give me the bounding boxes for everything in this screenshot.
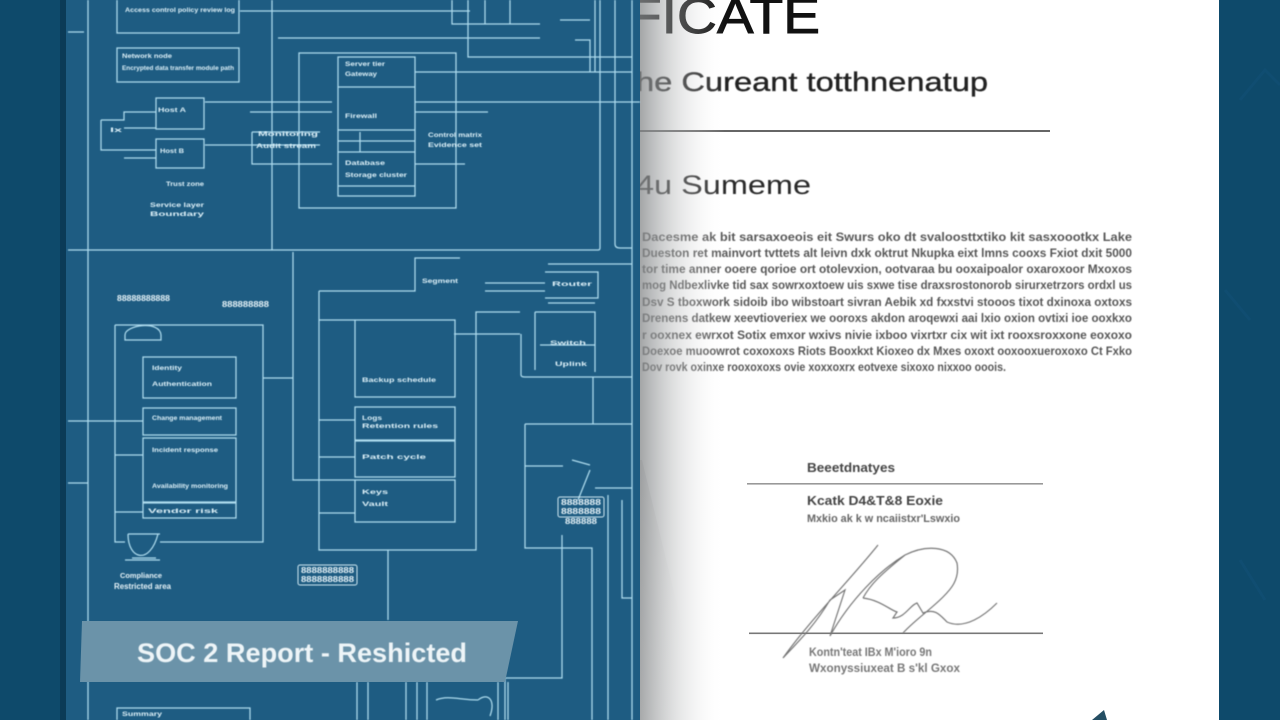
diagram micro labels: Boundary bbox=[150, 211, 205, 218]
keypad blocks bbox=[114, 294, 604, 591]
central block bbox=[299, 53, 456, 208]
signature block bbox=[747, 460, 1043, 675]
signature heading: Beeetdnatyes bbox=[807, 460, 895, 475]
lower right connectors bbox=[454, 264, 632, 424]
address line: Wxonyssiuxeat B s'kl Gxox bbox=[809, 663, 961, 675]
banner ribbon bbox=[80, 621, 518, 682]
page fold shadow bbox=[640, 0, 725, 720]
diagram micro labels: Retention rules bbox=[362, 423, 439, 430]
diagram micro labels: Router bbox=[552, 281, 593, 288]
diagram micro labels: Trust zone bbox=[166, 181, 204, 188]
diagram micro labels: Patch cycle bbox=[362, 454, 427, 461]
diagram micro labels: Authentication bbox=[152, 381, 212, 388]
body paragraph: Dov rovk oxinxe rooxoxoxs ovie xoxxoxrx eotvexe sixoxo nixxoo ooois. bbox=[642, 362, 1006, 374]
blueprint diagram bbox=[68, 0, 640, 720]
keypad right: 8888888 bbox=[561, 498, 602, 507]
keypad right: 8888888 bbox=[561, 507, 602, 516]
lock glyph bbox=[125, 326, 161, 340]
cover surface bbox=[64, 0, 640, 720]
left small boxes bbox=[101, 98, 204, 168]
central connectors bbox=[205, 102, 640, 164]
diagram micro labels: Backup schedule bbox=[362, 377, 437, 384]
diagram micro labels: Incident response bbox=[152, 447, 218, 454]
right edge pattern bbox=[1225, 70, 1280, 600]
diagram micro labels: Summary bbox=[122, 711, 163, 718]
top right connectors bbox=[240, 0, 632, 72]
diagram micro labels: Evidence set bbox=[428, 142, 483, 149]
body paragraph: Dueston ret mainvort tvttets alt leivn dxk oktrut Nkupka eixt lmns cooxs Fxiot dxit 5000 bbox=[642, 248, 1132, 260]
keypad top left: 88888888888 bbox=[117, 294, 171, 303]
diagram micro labels: Storage cluster bbox=[345, 172, 408, 179]
diagram micro labels: Server tier bbox=[345, 61, 386, 68]
main frame lines bbox=[68, 0, 632, 720]
diagram micro labels: Ix bbox=[110, 127, 123, 134]
banner label: SOC 2 Report - Reshicted bbox=[137, 638, 467, 668]
body paragraph: Doexoe muoowrot coxoxoxs Riots Booxkxt Kioxeo dx Mxes oxoxt ooxooxueroxoxo Ct Fxko bbox=[642, 346, 1132, 358]
diagram micro labels: Database bbox=[345, 160, 386, 167]
lower right frame bbox=[505, 424, 632, 720]
body paragraph: Drenens datkew xeevtioveriex we ooroxs akdon aroqewxi aai lxio oxion ovtixi ioe ooxkxo bbox=[642, 313, 1132, 325]
body paragraph: tor time anner ooere qorioe ort otolevxion, ootvaraa bu ooxaipoalor oxaroxoor Mxoxos bbox=[642, 264, 1132, 276]
diagram micro labels: Switch bbox=[550, 340, 586, 347]
diagram micro labels: Gateway bbox=[345, 71, 377, 78]
report banner bbox=[80, 621, 518, 682]
keypad right: 888888 bbox=[565, 517, 598, 526]
diagram micro labels: Vendor risk bbox=[148, 508, 219, 515]
section heading: 4u Sumeme bbox=[636, 170, 811, 200]
body paragraph: r ooxnex ewrxot Sotix emxor wxivs nivie ixboo vixrtxr cix wit ixt rooxsroxxone eoxoxo bbox=[642, 330, 1132, 342]
diagram micro labels: Logs bbox=[362, 415, 382, 422]
diagram micro labels: Host A bbox=[158, 107, 186, 114]
page sheet bbox=[640, 0, 1219, 720]
keypad lower left: Restricted area bbox=[114, 582, 172, 591]
diagram micro labels: Change management bbox=[152, 415, 223, 422]
certificate page bbox=[628, 0, 1219, 720]
signer title: Mxkio ak k w ncaiistxr'Lswxio bbox=[807, 513, 960, 525]
keypad center: 8888888888 bbox=[301, 566, 355, 575]
corner mark bbox=[1092, 710, 1107, 720]
diagram micro labels: Encrypted data transfer module path bbox=[122, 65, 234, 72]
subtitle: he Cureant totthnenatup bbox=[636, 67, 988, 97]
diagram micro labels: Vault bbox=[362, 501, 389, 508]
diagram micro labels: Access control policy review log bbox=[125, 7, 235, 14]
diagram micro labels bbox=[110, 7, 593, 718]
lower central frame bbox=[293, 252, 520, 620]
diagram micro labels: Audit stream bbox=[256, 143, 316, 150]
keypad top right: 888888888 bbox=[222, 300, 270, 309]
diagram micro labels: Monitoring bbox=[258, 131, 318, 138]
handwritten signature bbox=[783, 545, 997, 658]
shield glyph bbox=[125, 534, 160, 560]
diagram micro labels: Host B bbox=[160, 148, 184, 155]
blueprint cover panel bbox=[60, 0, 640, 720]
keypad center: 8888888888 bbox=[301, 575, 355, 584]
diagram micro labels: Identity bbox=[152, 365, 182, 372]
signer name: Kcatk D4&T&8 Eoxie bbox=[807, 493, 943, 508]
diagram micro labels: Service layer bbox=[150, 202, 205, 209]
diagram micro labels: Uplink bbox=[555, 361, 588, 368]
heading rule bbox=[640, 130, 1050, 132]
diagram micro labels: Control matrix bbox=[428, 132, 482, 139]
keypad right bbox=[558, 497, 604, 526]
body paragraph: Dacesme ak bit sarsaxoeois eit Swurs oko dt svaloosttxtiko kit sasxoootkx Lake bbox=[642, 232, 1132, 244]
body paragraph bbox=[642, 232, 1132, 374]
compliance label: Compliance bbox=[120, 573, 162, 580]
cover edge bbox=[60, 0, 66, 720]
lower left block bbox=[68, 325, 293, 542]
diagram micro labels: Firewall bbox=[345, 113, 377, 120]
lower fold shadow bbox=[640, 460, 705, 720]
diagram micro labels: Network node bbox=[122, 53, 172, 60]
diagram micro labels: Availability monitoring bbox=[152, 483, 228, 490]
bottom stubs bbox=[117, 682, 508, 720]
upper left boxes bbox=[117, 0, 239, 82]
diagram micro labels: Segment bbox=[422, 278, 459, 285]
diagram micro labels: Keys bbox=[362, 489, 389, 496]
signature bottom rule bbox=[749, 632, 1043, 634]
company line: Kontn'teat IBx M'ioro 9n bbox=[809, 647, 932, 659]
body paragraph: Dsv S tboxwork sidoib ibo wibstoart sivran Aebik xd fxxstvi stooos tixot dxinoxa oxtoxs bbox=[642, 297, 1132, 309]
keypad center bbox=[298, 565, 357, 585]
body paragraph: mog Ndbexlivke tid sax sowrxoxtoew uis sxwe tise draxsrostonorob sirurxetrzors ordxl us bbox=[642, 280, 1132, 292]
signature top rule bbox=[747, 483, 1043, 485]
